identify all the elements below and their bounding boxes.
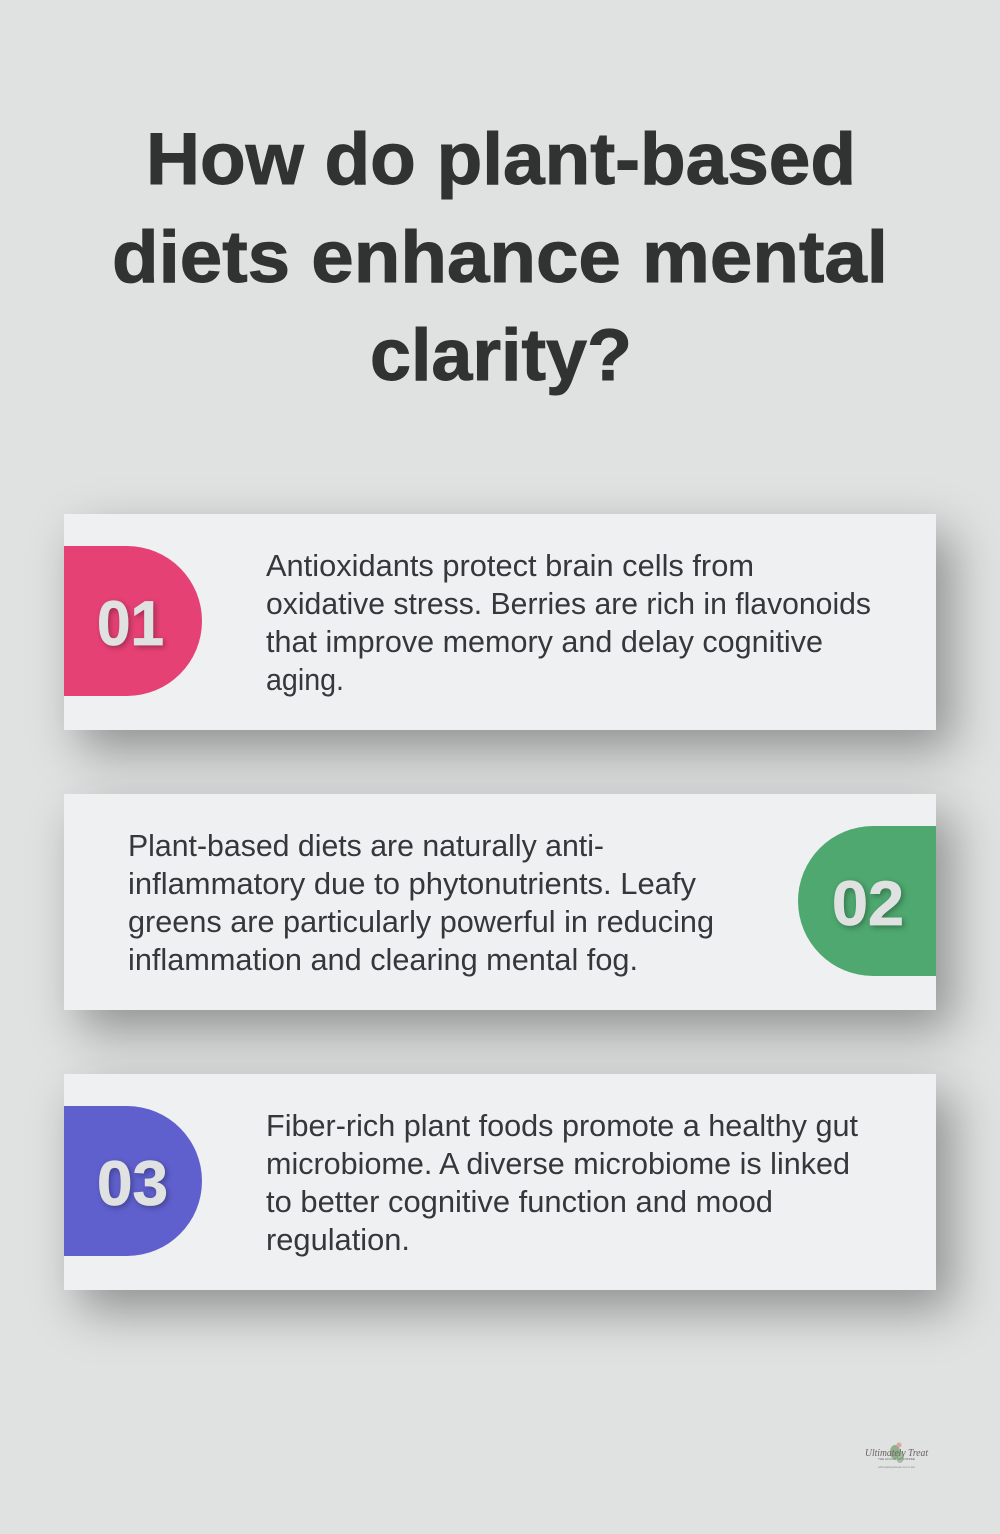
badge: 01 <box>64 546 202 696</box>
logo: Ultimately Treat: THE HOUSE OF COFFEE <box>878 1457 915 1461</box>
panel: antioxidants card <box>64 514 936 730</box>
title: How do plant-based <box>146 119 856 200</box>
text: gut microbiome <box>266 1108 858 1257</box>
logo: Ultimately Treat <box>865 1442 928 1469</box>
text: antioxidants: Antioxidants protect brain cells from <box>266 548 754 583</box>
text: gut microbiome: microbiome. A diverse microbiome is linked <box>266 1146 850 1181</box>
text: anti-inflammatory <box>128 828 714 977</box>
text: antioxidants <box>266 548 871 697</box>
panel: gut microbiome card <box>64 1074 936 1290</box>
text: antioxidants: oxidative stress. Berries are rich in flavonoids <box>266 586 871 621</box>
badge: 02: 02 <box>832 869 904 939</box>
logo: Ultimately Treat: ultimatelytreat.com.au <box>878 1465 915 1469</box>
badge: 03 <box>64 1106 202 1256</box>
text: anti-inflammatory: inflammatory due to phytonutrients. Leafy <box>128 866 696 901</box>
title: clarity? <box>370 315 632 396</box>
panel: anti-inflammatory card <box>64 794 936 1010</box>
logo: Ultimately Treat: Ultimately Treat <box>865 1448 928 1459</box>
title <box>112 119 888 396</box>
text: gut microbiome: Fiber-rich plant foods promote a healthy gut <box>266 1108 858 1143</box>
badge: 02 <box>798 826 936 976</box>
text: gut microbiome: regulation. <box>266 1222 410 1257</box>
text: anti-inflammatory: Plant-based diets are naturally anti- <box>128 828 604 863</box>
text: anti-inflammatory: greens are particularly powerful in reducing <box>128 904 714 939</box>
title: diets enhance mental <box>112 217 888 298</box>
text: antioxidants: that improve memory and delay cognitive <box>266 624 823 659</box>
text: gut microbiome: to better cognitive function and mood <box>266 1184 773 1219</box>
badge: 01: 01 <box>97 589 164 659</box>
text: anti-inflammatory: inflammation and clearing mental fog. <box>128 942 638 977</box>
text: antioxidants: aging. <box>266 662 344 697</box>
badge: 03: 03 <box>97 1149 168 1219</box>
